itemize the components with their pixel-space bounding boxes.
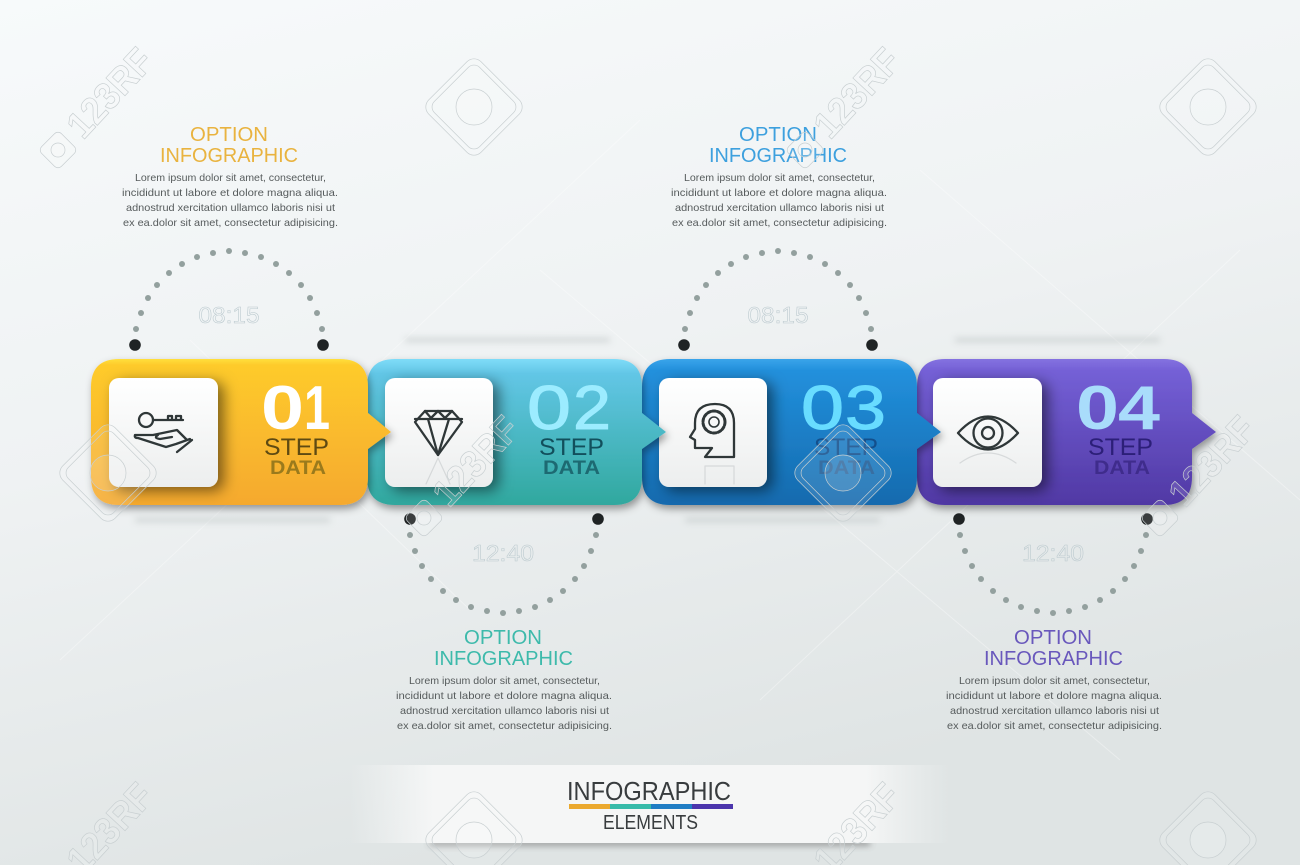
step 1 data label: DATA [270,458,326,479]
step 3 icon tile [659,378,767,487]
text block: option 3: ex ea.dolor sit amet, consectetur adipisicing. [672,217,887,229]
text block: option 3: adnostrud xercitation ullamco laboris nisi ut [675,202,884,214]
step 1 number: 0 [261,374,304,443]
panel: step 3 card [642,359,941,505]
text block: option 2: adnostrud xercitation ullamco laboris nisi ut [400,705,609,717]
text block: option 4: OPTION [1014,627,1092,649]
step 3 label: STEP [814,434,878,461]
step 4 label: STEP [1088,434,1153,461]
watermark stamps: 123RF [806,41,909,147]
text block: option 4: INFOGRAPHIC [984,648,1123,670]
text block: option 3: OPTION [739,124,817,146]
step 4 number: 4 [1118,374,1161,443]
watermark stamps: 123RF [1161,409,1264,515]
icon: eye [958,416,1018,463]
step 1 number: 1 [304,374,330,443]
text block: option 2: Lorem ipsum dolor sit amet, consectetur, [409,675,600,687]
connector arc 2 (12:40) [404,513,604,616]
step 1 icon tile [109,378,218,487]
floating shadows under and over the cards [135,338,1160,522]
icon: key in hand [135,413,192,452]
step 4 icon tile [933,378,1042,487]
text block: option 4: Lorem ipsum dolor sit amet, consectetur, [959,675,1150,687]
step 4 number: 0 [1076,374,1119,443]
icon: diamond [415,411,462,484]
text block: option 4: ex ea.dolor sit amet, consectetur adipisicing. [947,720,1162,732]
text block: option 1: adnostrud xercitation ullamco laboris nisi ut [126,202,335,214]
step 2 number [527,374,611,443]
connector arc 3 (08:15) [678,248,878,351]
text block: option 4: adnostrud xercitation ullamco laboris nisi ut [950,705,1159,717]
connector arc 4 (12:40) [953,513,1153,616]
step 2 icon tile [385,378,493,487]
text block: option 3 [671,124,887,229]
text block: option 3: Lorem ipsum dolor sit amet, consectetur, [684,172,875,184]
text block: option 3: incididunt ut labore et dolore magna aliqua. [671,187,887,199]
step 3 number [801,374,886,443]
step 2 data label: DATA [543,458,600,479]
connector arc 1 (08:15): 08:15 [198,302,260,328]
text block: option 2: INFOGRAPHIC [434,648,573,670]
icon: head with gear [690,404,734,484]
text block: option 2 [396,627,612,732]
step 2 number: 0 [527,374,571,443]
text block: option 4: incididunt ut labore et dolore magna aliqua. [946,690,1162,702]
text block: option 1 [122,124,338,229]
text block: option 2: OPTION [464,627,542,649]
text block: option 1: incididunt ut labore et dolore magna aliqua. [122,187,338,199]
text block: option 3: INFOGRAPHIC [709,145,847,167]
panel: step 2 card [367,359,666,505]
step 3 number: 0 [801,374,844,443]
step 3 number: 3 [845,374,886,443]
step 4 number [1076,374,1161,443]
subtitle: elements: ELEMENTS [603,812,698,834]
text block: option 1: ex ea.dolor sit amet, consectetur adipisicing. [123,217,338,229]
step 2 number: 2 [573,374,611,443]
text block: option 1: INFOGRAPHIC [160,145,298,167]
title banner [350,765,950,845]
panel: step 4 card [917,359,1216,505]
step 1 number [261,374,330,443]
text block: option 2: ex ea.dolor sit amet, consectetur adipisicing. [397,720,612,732]
text block: option 4 [946,627,1162,732]
watermark stamps: 123RF [59,41,162,147]
text block: option 1: Lorem ipsum dolor sit amet, consectetur, [135,172,326,184]
text block: option 2: incididunt ut labore et dolore magna aliqua. [396,690,612,702]
connector arc 3 (08:15): 08:15 [748,302,808,328]
step 4 data label: DATA [1094,458,1150,479]
connector arc 2 (12:40): 12:40 [472,540,534,566]
connector arc 1 (08:15) [129,248,329,351]
connector arc 4 (12:40): 12:40 [1022,540,1084,566]
text block: option 1: OPTION [190,124,268,146]
faint diagonal light rays [60,120,1300,760]
step 3 data label: DATA [818,458,875,479]
watermark stamps: 123RF [425,409,528,515]
step 1 label: STEP [264,434,329,461]
panel: step 1 card [91,359,391,505]
step 2 label: STEP [539,434,604,461]
colour bar [569,804,733,809]
title: infographic: INFOGRAPHIC [567,776,731,806]
